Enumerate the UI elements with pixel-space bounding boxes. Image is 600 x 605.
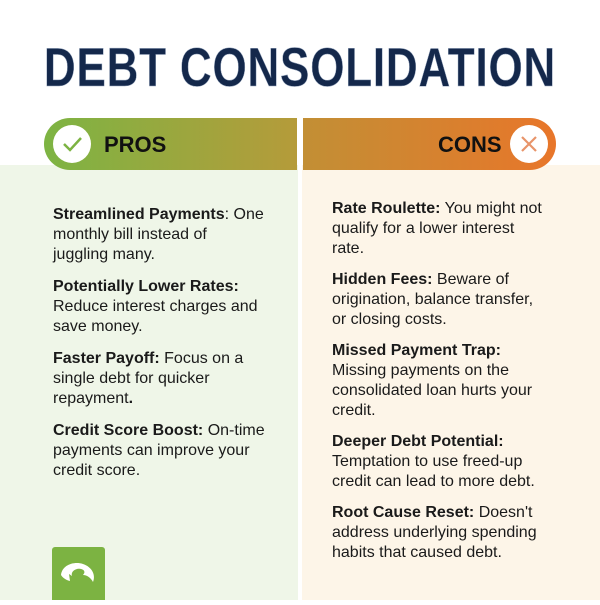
cons list [332, 200, 542, 561]
cons list: credit can lead to more debt. [332, 473, 535, 490]
pros list: Faster Payoff: Focus on a [53, 350, 243, 367]
pros list: Reduce interest charges and [53, 298, 258, 315]
cons list: Deeper Debt Potential: [332, 433, 504, 450]
pros list: Credit Score Boost: On-time [53, 422, 265, 439]
cons list: Root Cause Reset: Doesn't [332, 504, 532, 521]
icon: check [53, 125, 91, 163]
pros list: Potentially Lower Rates: [53, 278, 239, 295]
cons list: qualify for a lower interest [332, 220, 514, 237]
label: pros: PROS [104, 132, 166, 157]
cons list: Missed Payment Trap: [332, 342, 501, 359]
logo [52, 547, 105, 600]
title: DEBT CONSOLIDATION [44, 36, 556, 98]
cons list: consolidated loan hurts your [332, 382, 532, 399]
cons list: credit. [332, 402, 376, 419]
pros list: single debt for quicker [53, 370, 210, 387]
pros list [52, 206, 265, 479]
cons list: Missing payments on the [332, 362, 509, 379]
pros list: credit score. [53, 462, 140, 479]
pros list: monthly bill instead of [53, 226, 207, 243]
pros list: payments can improve your [53, 442, 250, 459]
pros list: repayment. [53, 390, 133, 407]
label: cons: CONS [438, 132, 502, 157]
header: pros [44, 118, 297, 170]
cons list: Hidden Fees: Beware of [332, 271, 509, 288]
cons list: or closing costs. [332, 311, 447, 328]
left panel background [0, 165, 298, 600]
pros list: Streamlined Payments: One [53, 206, 264, 223]
right panel background [302, 165, 600, 600]
cons list: origination, balance transfer, [332, 291, 533, 308]
cons list: address underlying spending [332, 524, 537, 541]
header: cons [303, 118, 556, 170]
pros list: juggling many. [53, 246, 155, 263]
cons list: rate. [332, 240, 364, 257]
pros list: save money. [53, 318, 143, 335]
cons list: Temptation to use freed-up [332, 453, 522, 470]
icon: x [510, 125, 548, 163]
cons list: habits that caused debt. [332, 544, 502, 561]
cons list: Rate Roulette: You might not [332, 200, 542, 217]
